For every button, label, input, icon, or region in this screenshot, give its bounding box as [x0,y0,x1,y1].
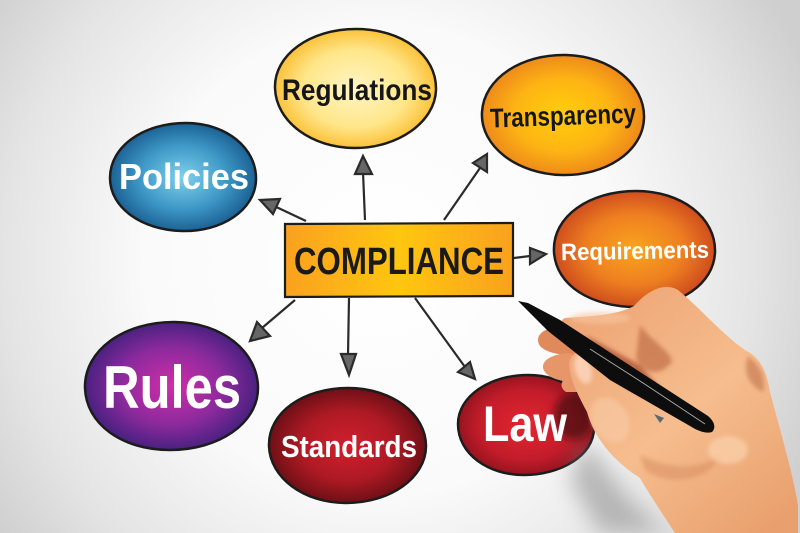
hand shading [570,312,764,480]
bubble: Requirements [554,191,715,307]
bubble: Standards: Standards [281,429,417,464]
back of hand and thumb [561,287,798,533]
central box: Compliance [285,223,513,297]
bubble: Transparency [482,55,644,175]
gap with shadow beside thumb [654,414,664,423]
bubble: Standards [269,388,426,503]
arrow: to Transparency [444,154,487,220]
bubble: Transparency: Transparency [490,98,636,134]
bubble: Law [458,375,594,475]
arrow: to Rules [250,300,295,341]
arrow: to Law [415,298,475,379]
bubble: Requirements: Requirements [561,237,709,266]
bubble: Policies [110,123,256,231]
central box: Compliance: COMPLIANCE [294,241,504,283]
bubble: Regulations: Regulations [282,74,432,107]
bubble: Regulations [275,29,436,148]
bubble: Rules [85,322,258,450]
arrow: to Policies [260,199,306,221]
hand shadow [570,440,665,533]
arrows [250,154,546,379]
middle finger [538,325,600,356]
pen highlight [590,349,705,424]
arrow: to Requirements [514,248,546,264]
bubble: Policies: Policies [119,156,249,197]
bubble: Rules: Rules [103,354,241,421]
arrow: to Regulations [355,156,372,220]
icon: pen [518,301,714,433]
hand with pen [518,287,798,533]
ring finger [543,353,590,382]
bubble: Law: Law [483,396,567,452]
arrow: to Standards [341,298,356,375]
little finger [562,376,580,392]
